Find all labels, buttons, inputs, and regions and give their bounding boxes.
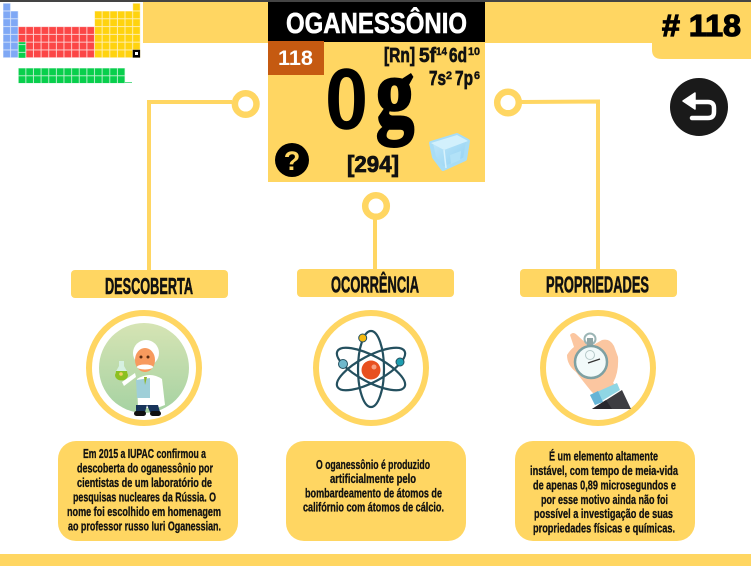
text block: descoberta: cientistas de um laboratório de xyxy=(77,476,212,490)
text block: descoberta: nome foi escolhido em homenagem xyxy=(67,505,221,519)
connector: propriedades xyxy=(497,92,598,270)
text block: descoberta: pesquisas nucleares da Rússia. O xyxy=(73,490,216,504)
electron configuration: 14 xyxy=(436,46,448,58)
text block: ocorrencia: artificialmente pelo xyxy=(330,472,416,486)
element card xyxy=(268,2,485,182)
connector: ocorrencia xyxy=(365,195,387,270)
electron configuration: 2 xyxy=(446,70,452,82)
electron configuration: 5f xyxy=(419,45,436,67)
heading: ocorrencia xyxy=(297,269,454,298)
text block: descoberta xyxy=(58,441,238,541)
text block: propriedades xyxy=(515,441,695,541)
text block: ocorrencia: bombardeamento de átomos de xyxy=(305,486,442,500)
title bar: OGANESSÔNIO xyxy=(286,6,467,40)
top yellow banner xyxy=(143,2,751,43)
atomic number xyxy=(268,41,324,75)
heading: propriedades xyxy=(520,269,677,298)
heading: ocorrencia: OCORRÊNCIA xyxy=(331,270,419,298)
atomic number: 118 xyxy=(278,47,313,70)
text block: ocorrencia: O oganessônio é produzido xyxy=(316,458,430,472)
electron configuration xyxy=(384,45,480,90)
text block: propriedades: propriedades físicas e químicas. xyxy=(533,522,675,536)
heading: descoberta xyxy=(71,270,228,299)
text block: ocorrencia: califórnio com átomos de cálcio. xyxy=(303,500,444,514)
text block: ocorrencia xyxy=(286,441,466,541)
panel: ocorrencia xyxy=(286,269,466,541)
icon: hand with stopwatch xyxy=(543,313,653,423)
symbol: g xyxy=(376,39,414,147)
back button xyxy=(670,78,728,136)
electron configuration: 6 xyxy=(474,70,480,82)
text block: propriedades: instável, com tempo de meia-vida xyxy=(530,464,679,478)
electron configuration: 6d xyxy=(449,45,467,67)
text block: descoberta: descoberta do oganessônio por xyxy=(77,462,213,476)
text block: propriedades: por esse motivo ainda não foi xyxy=(541,493,668,507)
heading: descoberta: DESCOBERTA xyxy=(105,273,193,299)
text block: propriedades: É um elemento altamente xyxy=(549,448,658,464)
icon: unknown category xyxy=(275,143,309,177)
electron configuration: [Rn] xyxy=(384,45,415,67)
icon: atom xyxy=(316,313,426,423)
icon: unknown category: ? xyxy=(284,146,300,176)
text block: descoberta: Em 2015 a IUPAC confirmou a xyxy=(83,447,207,461)
text block: propriedades: de apenas 0,89 microsegundos e xyxy=(533,478,676,492)
title bar xyxy=(268,2,485,42)
element number tab: # 118 xyxy=(662,8,741,43)
electron configuration: 7p xyxy=(455,68,473,90)
heading: propriedades: PROPRIEDADES xyxy=(546,272,649,298)
icon: ice cube xyxy=(431,135,468,169)
panel: propriedades xyxy=(515,269,695,541)
element number tab xyxy=(652,8,751,59)
text block: descoberta: ao professor russo Iuri Oganessian. xyxy=(68,520,221,534)
connector: descoberta xyxy=(149,93,256,270)
periodic table mini map xyxy=(0,2,143,86)
electron configuration: 7s xyxy=(429,68,446,90)
footer band xyxy=(0,554,751,566)
symbol: O xyxy=(327,52,366,146)
symbol xyxy=(327,39,414,147)
panel: descoberta xyxy=(58,270,238,541)
text block: propriedades: possível a investigação de suas xyxy=(534,507,673,521)
electron configuration: 10 xyxy=(468,46,480,58)
icon: scientist xyxy=(89,313,199,423)
atomic mass: [294] xyxy=(347,151,399,177)
